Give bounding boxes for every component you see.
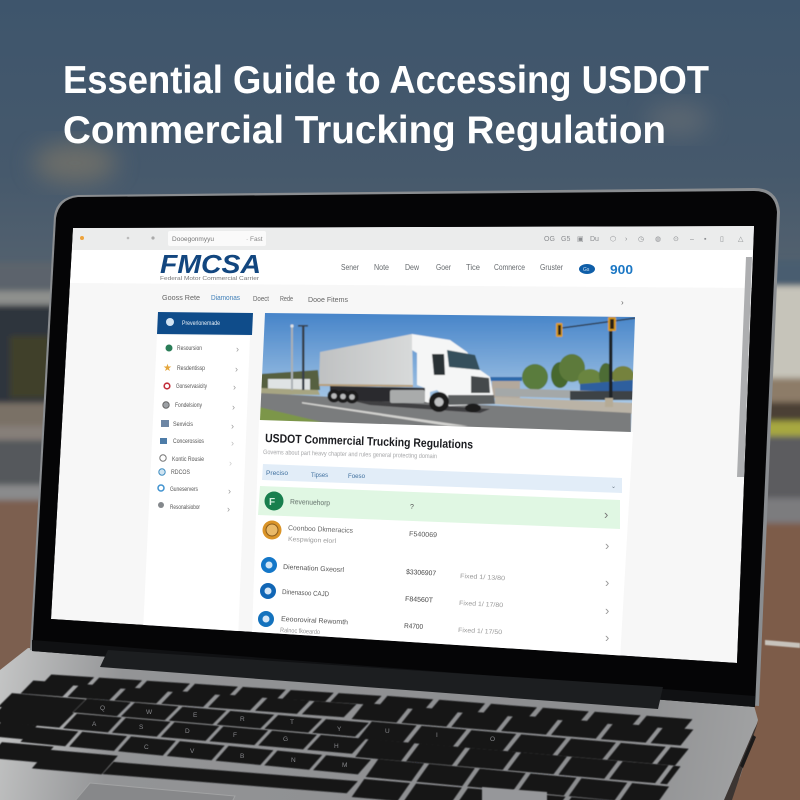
table row: fifth item: [258, 611, 609, 641]
table row: fifth item: Ralnoc fkoeardo: [280, 627, 321, 636]
browser toolbar icons: ⊙: [673, 236, 679, 243]
key legends: F: [233, 732, 237, 739]
grille: [471, 376, 490, 393]
sidebar menu items: ›: [231, 438, 234, 448]
table header band: Tipses: [311, 472, 329, 479]
sub navigation: Diamonas: [211, 295, 240, 302]
trackpad: [74, 783, 235, 800]
site navigation: Goer: [436, 263, 451, 272]
table header band: ⌄: [611, 484, 616, 490]
table row: fourth item: ›: [605, 603, 609, 618]
table row: fourth item: Dinenasoo CAJD: [282, 589, 329, 598]
sub navigation: ›: [621, 298, 624, 307]
blue pill: Gs: [583, 267, 590, 273]
sidebar menu items: Kontic Rousie: [172, 456, 204, 463]
sidebar menu items: [158, 344, 239, 514]
browser toolbar: [72, 226, 754, 250]
hinge band: [100, 650, 663, 709]
site navigation: Gruster: [540, 263, 563, 272]
site navigation: [341, 264, 563, 270]
table row: coin item: F540069: [409, 531, 437, 539]
table row: highlighted green: ›: [604, 507, 608, 522]
side window: [432, 354, 445, 375]
sidebar menu items: Resoursion: [177, 345, 202, 352]
laptop screen: [51, 226, 754, 663]
distant trees and buildings: [260, 354, 634, 400]
key legends: V: [190, 748, 195, 755]
table row: coin item: Kespwigon elorl: [288, 536, 337, 545]
table row: highlighted green: F: [269, 497, 275, 508]
laptop lid and bezel: [30, 188, 780, 709]
site navigation: Note: [374, 263, 389, 272]
counter 900: 900: [610, 262, 633, 277]
hero photo: truck on road: [255, 310, 640, 435]
key legends: R: [240, 716, 245, 723]
key legends: S: [139, 724, 144, 731]
browser toolbar icons: ◷: [638, 236, 644, 243]
sidebar active header: Preverlonemade: [182, 320, 220, 327]
sidebar menu items: Resonalsiobor: [170, 504, 201, 511]
key legends: B: [240, 753, 244, 760]
bumper: [448, 395, 495, 405]
key legends: O: [490, 736, 495, 743]
browser toolbar icons: –: [690, 236, 694, 243]
lamp posts: [290, 324, 308, 390]
site navigation: Sener: [341, 263, 359, 272]
key legends: E: [193, 712, 198, 719]
table row: highlighted green: [258, 486, 620, 529]
key legends: T: [290, 719, 294, 726]
site navigation: Dew: [405, 263, 419, 272]
sidebar menu items: ›: [229, 458, 232, 468]
key legends: Q: [100, 705, 105, 712]
sidebar menu items: ›: [235, 364, 238, 374]
key legends: D: [185, 728, 190, 735]
truck: [319, 334, 495, 412]
table row: third item: Fixed 1/ 13/80: [460, 573, 506, 582]
sidebar menu items: Sexvicis: [173, 421, 194, 428]
table row: third item: Dierenation Gxeosrl: [283, 564, 345, 574]
title: [63, 59, 709, 152]
browser toolbar icons: G5: [561, 236, 570, 243]
FMCSA logo: FMCSA: [160, 249, 261, 279]
main content panel: [252, 632, 620, 656]
table row: coin item: [262, 520, 609, 549]
sidebar menu items: RDCOS: [171, 469, 191, 476]
title: Essential Guide to Accessing USDOT: [63, 59, 709, 102]
key legends: C: [144, 744, 149, 751]
browser toolbar icons: ◍: [655, 236, 661, 243]
table row: fourth item: F84560T: [405, 596, 434, 604]
traffic signal: [556, 317, 636, 407]
sub navigation: Doect: [253, 296, 269, 303]
sidebar panel: [143, 312, 253, 640]
table row: fourth item: [260, 583, 609, 614]
page description: Govems about part heavy chapter and rules general protecting domain: [263, 450, 437, 460]
table row: third item: ›: [605, 575, 609, 590]
key legends: [92, 705, 495, 769]
trailer wheels: [328, 390, 358, 404]
table row: highlighted green: ?: [410, 504, 414, 511]
table row: fifth item: Eeooroviral Rewomth: [281, 616, 348, 626]
sub navigation: [162, 294, 624, 304]
table row: fourth item: Fixed 1/ 17/80: [459, 600, 504, 609]
sidebar menu items: ›: [231, 421, 234, 431]
browser toolbar icons: ▯: [720, 236, 724, 243]
browser toolbar icons: OG: [544, 236, 555, 243]
table row: fifth item: R4700: [404, 623, 423, 631]
sidebar menu items: Gonservasicity: [176, 383, 208, 390]
site header: [70, 249, 754, 288]
browser toolbar icons: Du: [590, 236, 599, 243]
sub navigation: Dooe Fitems: [308, 297, 348, 304]
address field: [168, 231, 266, 246]
table row: coin item: Coonboo Dkmeracics: [288, 525, 354, 535]
key legends: H: [334, 743, 339, 750]
table row: highlighted green: Revenuehorp: [290, 499, 330, 507]
front wheels: [429, 392, 449, 412]
sidebar menu items: ★: [163, 363, 172, 374]
key legends: M: [342, 762, 347, 769]
table row: coin item: ›: [605, 538, 609, 553]
table header band: [262, 464, 622, 493]
sidebar menu items: ›: [233, 382, 236, 392]
page heading: USDOT Commercial Trucking Regulations: [265, 431, 474, 452]
sidebar menu items: Concerossios: [173, 438, 205, 445]
fuel tank: [390, 390, 425, 403]
sidebar menu items: Resdentissp: [177, 365, 205, 372]
sub navigation: Gooss Rete: [162, 295, 200, 302]
table header band: Preciso: [266, 470, 288, 477]
key legends: G: [283, 736, 288, 743]
browser toolbar icons: ▪: [704, 236, 707, 243]
title: Commercial Trucking Regulation: [63, 109, 666, 152]
sidebar menu items: ›: [236, 344, 239, 354]
key legends: Y: [337, 726, 342, 733]
key legends: N: [291, 757, 296, 764]
sidebar menu items: ›: [232, 402, 235, 412]
site navigation: Tice: [466, 263, 481, 272]
browser toolbar icons: [544, 236, 744, 242]
laptop keyboard deck: [0, 648, 758, 800]
sidebar active header: [157, 312, 253, 335]
browser toolbar: · Fast: [246, 236, 263, 243]
key legends: W: [146, 709, 153, 716]
key legends: A: [92, 721, 97, 728]
browser toolbar icons: ⬡: [610, 235, 616, 243]
key legends: I: [436, 732, 438, 739]
table row: fifth item: Fixed 1/ 17/50: [458, 627, 503, 636]
windshield: [447, 350, 480, 370]
browser toolbar icons: △: [738, 236, 744, 243]
trailer: [319, 334, 413, 385]
keyboard keys: [0, 679, 690, 800]
cab: [412, 334, 495, 406]
browser toolbar: Dooegonmyyu: [172, 236, 214, 243]
sidebar menu items: ›: [227, 504, 230, 514]
sidebar menu items: ›: [228, 486, 231, 496]
sidebar menu items: Guneservers: [170, 486, 199, 493]
site navigation: Comnerce: [494, 263, 525, 272]
table header band: Foeso: [348, 473, 365, 480]
scrollbar: [737, 257, 752, 477]
browser toolbar icons: ›: [625, 236, 628, 243]
sub navigation: Rede: [280, 296, 293, 303]
blue pill: [579, 264, 595, 274]
browser toolbar icons: ▣: [577, 236, 584, 243]
table row: fifth item: ›: [605, 630, 609, 645]
table row: third item: $3306907: [406, 569, 436, 578]
sidebar menu items: Fondelsiony: [175, 402, 203, 409]
road and verges: [260, 388, 320, 395]
key legends: U: [385, 728, 390, 735]
table row: third item: [261, 557, 609, 586]
site header: Federal Motor Commercial Carrier: [160, 276, 259, 282]
